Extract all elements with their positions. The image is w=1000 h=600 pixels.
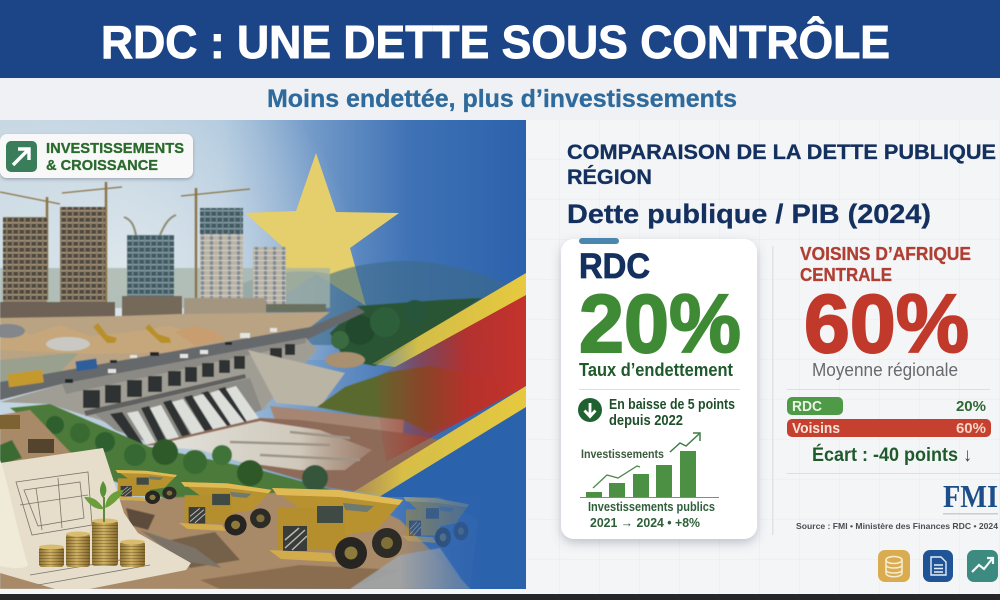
buildings: [0, 182, 326, 322]
forest slope: [330, 298, 482, 366]
subtitle: Moins endettée, plus d’investissements: [267, 85, 737, 113]
panel: voisins: CENTRALE: [800, 265, 892, 285]
bar chart: investissements: Investissements: [581, 447, 664, 461]
panel: voisins: Moyenne régionale: [812, 360, 958, 380]
icon: up-right arrow: [6, 141, 37, 172]
distant hills: [230, 261, 526, 345]
river: [145, 418, 440, 495]
panel: RDC card: Taux d’endettement: [579, 360, 733, 380]
sand piles and excavators: [0, 323, 225, 354]
panel: RDC card: RDC: [579, 247, 650, 286]
icon: document: [923, 550, 953, 582]
flag sky background: [0, 120, 526, 589]
badge text: INVESTISSEMENTS: [46, 140, 184, 157]
dump truck: medium: [179, 482, 271, 535]
chart heading: Dette publique / PIB (2024): [567, 199, 931, 229]
flag star: [245, 153, 399, 306]
concrete abutment: [248, 350, 345, 407]
chart caption: [588, 499, 715, 530]
source: Source : FMI • Ministère des Finances RDC • 2024: [796, 521, 998, 531]
badge: investissements et croissance: [0, 134, 193, 178]
subtitle: [0, 78, 1000, 120]
dirt ground: [0, 410, 470, 589]
panel: voisins: VOISINS D’AFRIQUE: [800, 244, 971, 264]
comparison heading: COMPARAISON DE LA DETTE PUBLIQUE: [567, 141, 996, 164]
bar: RDC: 20%: [956, 398, 986, 415]
bar: Voisins: [787, 419, 991, 437]
road and dam: [0, 307, 365, 448]
bar: Voisins: Voisins: [792, 421, 840, 437]
blue flag area: [380, 434, 483, 499]
column divider: [772, 246, 774, 535]
trend note: [609, 397, 735, 429]
lower piers: [95, 378, 262, 447]
background grid: [527, 120, 1000, 594]
grass hill: [317, 366, 526, 433]
comparison heading: [567, 141, 996, 189]
dam bays: [83, 344, 295, 408]
lower yellow stripe: [350, 386, 526, 497]
gap callout: Écart : -40 points ↓: [812, 444, 972, 466]
badge: investissements et croissance: & CROISSANCE: [46, 157, 158, 174]
icon: down arrow: [578, 398, 602, 422]
icon: growth chart: [967, 550, 998, 582]
dump truck: faded: [402, 497, 469, 547]
bar: RDC: RDC: [792, 399, 822, 415]
comparison heading: RÉGION: [567, 166, 652, 189]
blueprints: [0, 448, 191, 593]
panel: voisins: [787, 244, 1000, 474]
chart caption: 2021 → 2024 • +8%: [590, 515, 700, 530]
crane masts and jibs: [0, 182, 250, 310]
city base: [0, 268, 330, 308]
panel: RDC card: [561, 238, 757, 539]
bar: RDC: [787, 397, 986, 415]
dump truck: small: [114, 470, 177, 504]
dump truck: large: [269, 488, 403, 569]
value: 60%: 60%: [804, 277, 969, 370]
bar chart: investissements: [580, 433, 719, 498]
vegetation band: [10, 404, 333, 499]
coin stacks and sprout: [39, 481, 145, 567]
red flag band: [373, 293, 526, 462]
value: 20%: 20%: [579, 277, 741, 370]
chart caption: Investissements publics: [588, 499, 715, 514]
upper yellow stripe: [372, 273, 526, 367]
vehicles on road: [7, 328, 277, 387]
small trucks on track: [0, 415, 54, 453]
rocks fading into flag: [350, 548, 470, 589]
blue fade: [406, 498, 470, 589]
panel: photo and flag illustration: [0, 120, 526, 593]
retaining wall: [270, 406, 404, 433]
bar: Voisins: 60%: [956, 420, 986, 437]
trend note: depuis 2022: [609, 413, 683, 429]
construction ground: [0, 311, 330, 372]
bottom bar: [0, 594, 1000, 600]
icon: coins: [878, 550, 910, 582]
title: RDC : UNE DETTE SOUS CONTRÔLE: [101, 16, 890, 68]
header banner: [0, 0, 1000, 78]
trend note: En baisse de 5 points: [609, 397, 735, 413]
spillway water: [127, 386, 260, 447]
